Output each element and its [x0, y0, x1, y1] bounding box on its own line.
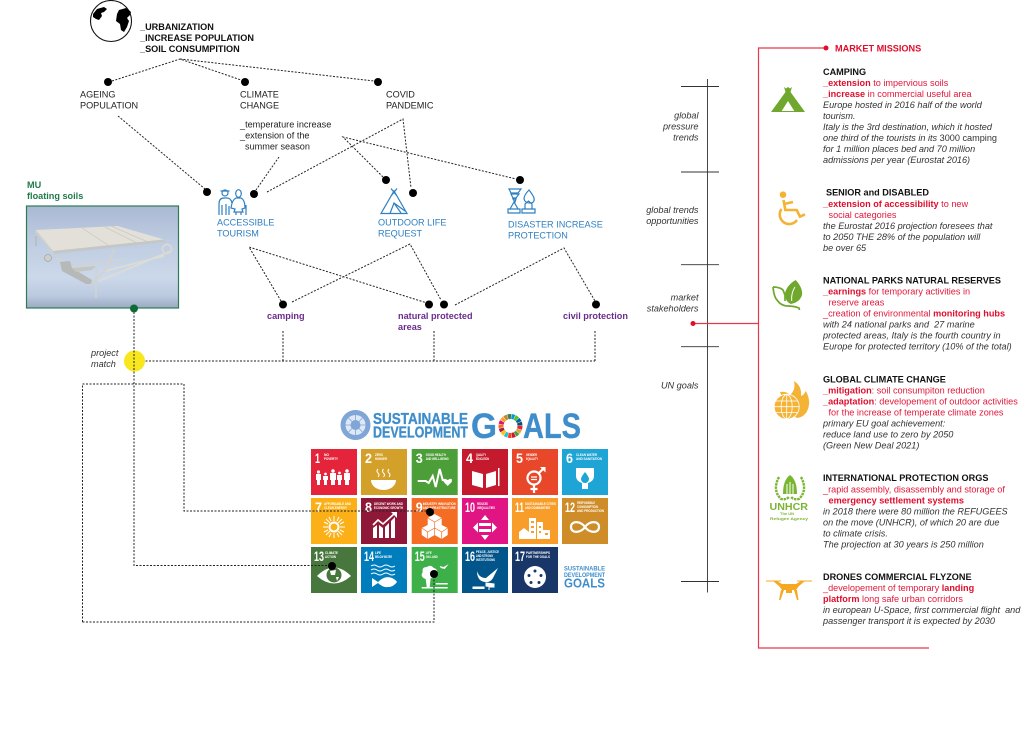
SDG tile 17 — [512, 547, 558, 593]
SDG tile 15: ON LAND — [426, 555, 438, 559]
SDG tile 15: LIFE — [426, 551, 432, 555]
text: senior and disabled: SENIOR and DISABLED — [826, 188, 929, 198]
text: international protection orgs: on the move (UNHCR), of which 20 are due — [823, 517, 1000, 527]
title: goals: G — [471, 407, 497, 446]
text: drones commercial flyzone: DRONES COMMERCIAL FLYZONE — [823, 572, 972, 582]
axis label: global trends opportunities: global trends — [646, 205, 699, 215]
axis label: UN goals: UN goals — [661, 380, 699, 390]
SDG tile 16: AND STRONG — [476, 554, 493, 558]
SDG tile 10: 10 — [465, 499, 475, 515]
small SDG logo: GOALS — [564, 576, 605, 590]
text: drones commercial flyzone — [822, 572, 1021, 626]
text: global climate change: (Green New Deal 2021) — [823, 440, 919, 450]
SDG tile 4: EDUCATION — [476, 457, 489, 461]
title: sustainable development — [373, 411, 468, 442]
icon: tent — [381, 188, 407, 214]
SDG tile 10 — [462, 498, 508, 544]
text: senior and disabled: social categories — [828, 210, 897, 220]
SDG tile 17: PARTNERSHIPS — [526, 551, 550, 555]
icon: drone — [766, 580, 812, 600]
SDG tile 11 — [512, 498, 558, 544]
SDG tile 13: ACTION — [325, 555, 336, 559]
SDG tile 9: INDUSTRY INNOVATION — [423, 502, 456, 506]
SDG tile 13 — [311, 547, 357, 593]
text: international protection orgs: _rapid assembly, disassembly and storage of — [822, 484, 1005, 494]
text: drones commercial flyzone: platform long safe urban corridors — [823, 594, 963, 604]
SDG tile 3: GOOD HEALTH — [426, 453, 446, 457]
label: project match — [90, 348, 119, 369]
SDG tile 14: BELOW WATER — [375, 555, 392, 559]
SDG tile 2: HUNGER — [375, 457, 387, 461]
label: climate change: CHANGE — [240, 100, 279, 110]
label: disaster increase protection: PROTECTION — [508, 230, 568, 240]
text: senior and disabled — [822, 188, 993, 253]
axis label: global pressure trends: pressure — [662, 122, 698, 132]
heading: global drivers — [139, 22, 254, 54]
icon: wheelchair — [780, 191, 805, 224]
SDG tile 5: EQUALITY — [526, 457, 538, 461]
label: climate change — [240, 89, 279, 110]
SDG tile 8: 8 — [365, 499, 372, 515]
timeline axis — [681, 79, 719, 592]
label: natural protected areas — [398, 311, 473, 332]
label: civil protection: civil protection — [563, 311, 628, 321]
SDG tile 1: POVERTY — [324, 457, 338, 461]
text: global climate change: GLOBAL CLIMATE CHANGE — [823, 374, 946, 384]
label: accessible tourism: TOURISM — [217, 228, 259, 238]
axis label: global pressure trends — [662, 110, 699, 142]
label: project match: match — [91, 359, 116, 369]
SDG tile 16: INSTITUTIONS — [476, 558, 495, 562]
heading: market missions: MARKET MISSIONS — [835, 43, 921, 53]
text: national parks natural reserves: reserve areas — [828, 297, 885, 307]
text: national parks natural reserves: _creation of environmental monitoring hubs — [822, 308, 1005, 318]
icon: UN emblem — [340, 410, 370, 440]
text: global climate change: primary EU goal achievement: — [822, 418, 946, 428]
SDG tile 16 — [462, 547, 508, 593]
text: national parks natural reserves: _earnings for temporary activities in — [822, 286, 970, 296]
text: national parks natural reserves: with 24 national parks and 27 marine — [823, 319, 975, 329]
SDG tile 9 — [412, 498, 458, 544]
label: accessible tourism — [217, 217, 274, 238]
icon: disaster types — [508, 189, 535, 213]
SDG tile 5: GENDER — [526, 453, 537, 457]
text: international protection orgs: The projection at 30 years is 250 million — [823, 539, 984, 549]
label: ageing population: AGEING — [80, 89, 116, 99]
axis label: market stakeholders: stakeholders — [647, 304, 699, 314]
SDG tile 13: 13 — [314, 548, 324, 564]
SDG tile 14: LIFE — [375, 551, 381, 555]
SDG tile 6: CLEAN WATER — [576, 453, 597, 457]
text: camping: CAMPING — [823, 67, 866, 77]
SDG tile 16: PEACE, JUSTICE — [476, 550, 499, 554]
SDG tile 2 — [361, 449, 407, 495]
heading: global drivers: _URBANIZATION — [139, 22, 214, 32]
SDG tile 2: ZERO — [375, 453, 383, 457]
axis label: global trends opportunities: opportunities — [646, 216, 699, 226]
SDG tile 11: SUSTAINABLE CITIES — [525, 502, 556, 506]
SDG tile 9: AND INFRASTRUCTURE — [423, 506, 456, 510]
SDG tile 4: 4 — [466, 450, 473, 466]
connectors: project match to UN goals — [82, 312, 438, 622]
text: international protection orgs: INTERNATIONAL PROTECTION ORGS — [823, 473, 988, 483]
connectors: opportunities to stakeholders — [249, 244, 600, 308]
label: natural protected areas: areas — [398, 322, 422, 332]
SDG tile 15: 15 — [415, 548, 425, 564]
icon: burning globe — [774, 381, 809, 419]
SDG tile 3: AND WELL-BEING — [426, 457, 449, 461]
icon: UNHCR logo: UNHCR — [770, 501, 808, 513]
text: camping — [822, 67, 997, 165]
SDG tile 14 — [361, 547, 407, 593]
axis label: global pressure trends: trends — [673, 132, 699, 142]
SDG tile 7 — [311, 498, 357, 544]
text: camping: Europe hosted in 2016 half of the world — [823, 100, 983, 110]
text: global climate change: _adaptation: developement of outdoor activities — [822, 396, 1018, 406]
icon: UNHCR logo — [770, 475, 809, 521]
icon: globe — [90, 0, 132, 42]
text: global climate change: _mitigation: soil consumpiton reduction — [822, 385, 985, 395]
SDG tile 7: 7 — [315, 499, 322, 515]
title: goals — [471, 407, 581, 446]
SDG tile 6 — [562, 449, 608, 495]
label: ageing population: POPULATION — [80, 100, 138, 110]
text: national parks natural reserves: NATIONAL PARKS NATURAL RESERVES — [823, 275, 1001, 285]
connectors: project match network — [135, 331, 595, 361]
SDG tile 2: 2 — [365, 450, 372, 466]
title: goals: ALS — [523, 407, 581, 446]
text: international protection orgs: to climate crisis. — [823, 528, 888, 538]
SDG tile 7: AFFORDABLE AND — [324, 502, 351, 506]
text: climate change effects — [239, 119, 331, 151]
SDG tile 1: 1 — [315, 450, 320, 466]
heading: MU floating soils — [27, 180, 83, 201]
SDG tile 12: CONSUMPTION — [577, 505, 598, 509]
SDG tile 9: 9 — [416, 499, 423, 515]
label: ageing population — [80, 89, 138, 110]
SDG tile 4: QUALITY — [476, 453, 486, 457]
small SDG logo: SUSTAINABLE — [564, 566, 606, 572]
SDG tile 1 — [311, 449, 357, 495]
SDG tile 5 — [512, 449, 558, 495]
SDG tile 12 — [562, 498, 608, 544]
axis label: market stakeholders: market — [671, 292, 699, 302]
text: national parks natural reserves — [822, 275, 1012, 351]
SDG tile 17: FOR THE GOALS — [526, 555, 550, 559]
axis label: global trends opportunities — [646, 205, 699, 226]
icon: camping tent — [771, 87, 805, 112]
text: camping: Italy is the 3rd destination, which it hosted — [823, 122, 993, 132]
SDG tile 5: 5 — [516, 450, 523, 466]
text: camping: tourism. — [823, 111, 855, 121]
label: disaster increase protection: DISASTER INCREASE — [508, 219, 603, 229]
text: senior and disabled: be over 65 — [823, 243, 867, 253]
text: drones commercial flyzone: in european U-Space, first commercial flight and — [823, 605, 1021, 615]
text: camping: _increase in commercial useful area — [822, 89, 973, 99]
image: floating soil structure render — [26, 206, 178, 308]
SDG tile 11: 11 — [515, 499, 524, 515]
small SDG logo: DEVELOPMENT — [564, 572, 605, 579]
text: drones commercial flyzone: _developement of temporary landing — [822, 583, 974, 593]
text: climate change effects: _temperature increase — [239, 119, 331, 129]
SDG tile 8 — [361, 498, 407, 544]
label: climate change: CLIMATE — [240, 89, 279, 99]
text: global climate change — [822, 374, 1018, 450]
icon: leaf — [773, 280, 802, 310]
marker: MU green dot — [130, 304, 138, 312]
icon: accessible tourism people — [219, 190, 246, 215]
text: camping: one third of the tourists in its 3000 camping — [823, 133, 997, 143]
SDG tile 6: AND SANITATION — [576, 457, 602, 461]
text: national parks natural reserves: Europe for protected territory (10% of the total) — [823, 341, 1012, 351]
label: covid pandemic: COVID — [386, 89, 415, 99]
title: sustainable development: DEVELOPMENT — [373, 424, 468, 442]
SDG tile 8: DECENT WORK AND — [374, 502, 403, 506]
heading: global drivers: _INCREASE POPULATION — [139, 33, 254, 43]
SDG tile 14: 14 — [364, 548, 374, 564]
heading: MU floating soils: MU — [27, 180, 42, 190]
label: project match: project — [90, 348, 119, 358]
SDG tile 3 — [412, 449, 458, 495]
red bracket: market missions — [690, 46, 929, 648]
text: senior and disabled: to 2050 THE 28% of the population will — [823, 232, 981, 242]
SDG tile 16: 16 — [465, 548, 475, 564]
text: camping: admissions per year (Eurostat 2016) — [823, 155, 970, 165]
SDG tile 12: 12 — [565, 499, 575, 515]
text: drones commercial flyzone: passenger transport it is expected by 2030 — [822, 616, 995, 626]
text: international protection orgs: in 2018 there were 80 million the REFUGEES — [823, 506, 1008, 516]
icon: SDG colour wheel — [497, 413, 524, 439]
text: international protection orgs — [822, 473, 1008, 549]
text: senior and disabled: _extension of accessibility to new — [822, 199, 968, 209]
SDG tile 11: AND COMMUNITIES — [525, 506, 550, 510]
SDG tile 7: CLEAN ENERGY — [324, 506, 347, 510]
SDG tile 13: CLIMATE — [325, 551, 338, 555]
icon: UNHCR logo: The UN — [780, 511, 794, 516]
axis label: global pressure trends: global — [674, 110, 699, 120]
label: camping: camping — [267, 311, 305, 321]
SDG tile 10: REDUCED — [477, 502, 488, 506]
label: disaster increase protection — [508, 219, 603, 240]
SDG header logo — [340, 407, 581, 446]
label: outdoor life request: OUTDOOR LIFE — [378, 217, 446, 227]
heading: MU floating soils: floating soils — [27, 191, 83, 201]
text: international protection orgs: emergency settlement systems — [828, 495, 964, 505]
text: senior and disabled: the Eurostat 2016 projection foresees that — [823, 221, 993, 231]
axis label: market stakeholders — [647, 292, 699, 314]
icon: UNHCR logo: Refugee Agency — [770, 516, 809, 521]
marker: project match — [124, 350, 145, 372]
SDG tile 12: AND PRODUCTION — [577, 509, 604, 513]
SDG tile 15 — [412, 547, 458, 593]
text: camping: for 1 million places bed and 70 million — [823, 144, 975, 154]
text: camping: _extension to impervious soils — [822, 78, 949, 88]
SDG tile 10: INEQUALITIES — [477, 506, 495, 510]
label: accessible tourism: ACCESSIBLE — [217, 217, 274, 227]
label: outdoor life request — [378, 217, 446, 238]
label: covid pandemic: PANDEMIC — [386, 100, 434, 110]
label: covid pandemic — [386, 89, 434, 110]
label: outdoor life request: REQUEST — [378, 228, 423, 238]
SDG tile 12: RESPONSIBLE — [577, 501, 595, 505]
heading: global drivers: _SOIL CONSUMPITION — [139, 44, 240, 54]
text: climate change effects: summer season — [245, 141, 310, 151]
SDG tile 3: 3 — [416, 450, 423, 466]
connectors: drivers to pressure trends — [104, 59, 382, 86]
small SDG logo — [564, 566, 606, 590]
SDG tile 6: 6 — [566, 450, 573, 466]
text: national parks natural reserves: protected areas, Italy is the fourth country in — [822, 330, 1001, 340]
SDG tile 4 — [462, 449, 508, 495]
SDG tile 1: NO — [324, 453, 329, 457]
label: natural protected areas: natural protected — [398, 311, 473, 321]
SDG tile 8: ECONOMIC GROWTH — [374, 506, 403, 510]
connectors: pressure trends to opportunities — [118, 116, 524, 198]
title: sustainable development: SUSTAINABLE — [373, 411, 468, 428]
text: global climate change: for the increase of temperate climate zones — [828, 407, 1004, 417]
text: global climate change: reduce land use to zero by 2050 — [823, 429, 953, 439]
SDG tile 17: 17 — [515, 548, 525, 564]
text: climate change effects: _extension of the — [239, 130, 310, 140]
